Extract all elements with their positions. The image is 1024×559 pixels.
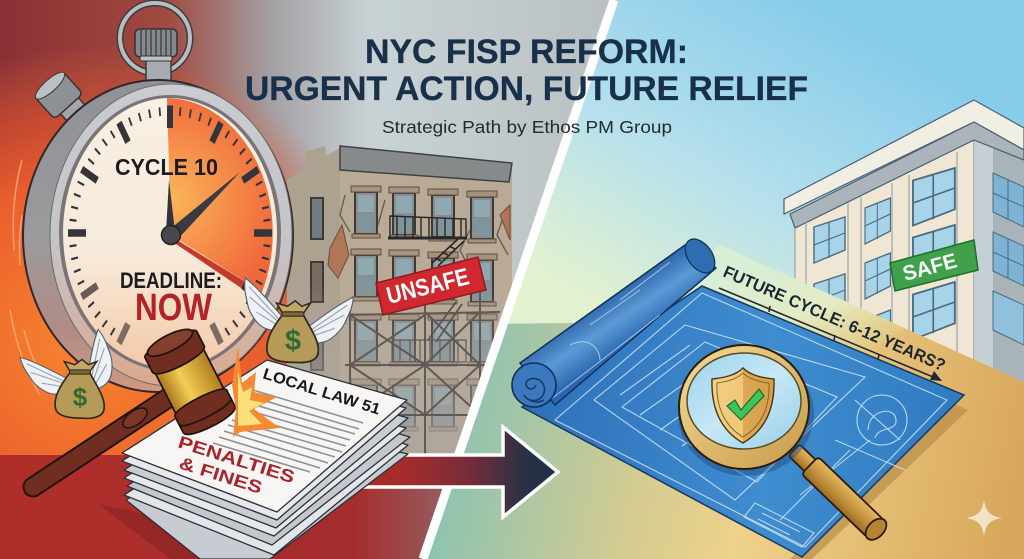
title block [245,33,808,137]
sign: unsafe: UNSAFE [384,263,472,310]
icon: paper stack [122,360,410,559]
hand pivot [162,226,180,244]
left facade [795,140,974,380]
label: future cycle timeline [719,262,948,381]
top ring [120,3,190,73]
dial face [63,98,277,368]
blueprint roll [520,245,716,405]
knurled crown [135,29,177,61]
exposed brick patches [328,205,510,278]
windows [814,168,1024,356]
divider: diagonal white line [423,0,614,559]
illustration: deteriorating building [287,146,517,455]
dollar sign: $ [285,325,301,357]
subtitle: Strategic Path by Ethos PM Group [382,117,672,137]
illustration: modern safe building [784,100,1024,400]
handle [785,441,890,544]
icon: gavel [33,323,238,487]
hour hand [166,180,175,232]
building cornice [340,146,512,182]
urgent wedge [167,98,273,292]
gavel head [141,323,238,439]
corner pier [974,138,993,388]
minute hand [170,172,240,240]
arrow: transition from left to right [340,427,558,517]
sign: safe: SAFE [900,249,959,286]
blueprint shadow [790,402,968,559]
left wing [20,357,72,394]
bezel [59,95,281,371]
document heading: LOCAL LAW 51 [261,366,383,419]
building facade [340,148,512,455]
upper fire escape balcony [388,216,467,266]
cornice [784,100,1024,228]
lens shadow [678,352,814,476]
cracks [339,195,508,260]
icon: impact burst [232,347,280,437]
right facade [993,148,1024,382]
title line two: URGENT ACTION, FUTURE RELIEF [245,70,808,108]
blueprint drawing lines [555,293,947,547]
building side wall [287,146,340,380]
document penalties text: & FINES [177,453,265,498]
document text lines [213,390,363,472]
shield [712,368,774,443]
timeline arrow [719,288,938,379]
gavel handle [33,398,168,487]
icon: blueprint [512,234,968,559]
label: now: NOW [135,287,212,329]
lower sheets [122,368,410,559]
blueprint sheet [522,286,964,557]
lower fire escape balcony [392,302,466,362]
document penalties text [176,432,297,498]
timeline text: FUTURE CYCLE: 6-12 YEARS? [720,262,948,375]
roll far end [679,234,721,278]
icon: flying money bag right [231,278,360,363]
roll spiral end [512,363,556,407]
bag [267,301,318,363]
ground: right side [400,245,1024,559]
icon: stopwatch [10,3,293,395]
side pusher [32,68,94,132]
rim [679,345,809,469]
facade pier lines [794,152,958,352]
scaffolding [345,290,500,455]
case outer [23,80,293,392]
right wing [66,329,130,394]
document penalties text: PENALTIES [176,432,297,487]
label: cycle 10: CYCLE 10 [115,154,218,180]
bag [55,359,104,418]
handle collar [120,404,150,432]
floor: left side [0,455,442,559]
title line one: NYC FISP REFORM: [365,33,688,71]
panel: left urgent background [0,0,610,455]
left wing [231,278,296,335]
icon: flying money bag left [20,329,130,418]
neck [146,56,171,84]
fade overlay [310,296,498,453]
top sheet [122,360,407,512]
arrow tip [930,371,942,381]
label: deadline: DEADLINE: [120,268,222,293]
facade windows [351,186,497,431]
motion lines [10,160,50,395]
wedge edge [176,240,262,298]
side windows [311,198,323,370]
sign: safe [890,240,978,291]
right wing [297,297,360,346]
icon: magnifying glass with shield [678,345,890,544]
icon: sparkle [966,500,1002,536]
dial ticks [68,106,272,343]
panel: right future background [508,0,1024,324]
roll details [550,262,670,400]
check mark [727,389,764,420]
dollar sign: $ [73,382,88,412]
floor shadow under papers [100,505,265,559]
case ring [50,84,292,386]
lens [687,353,801,449]
